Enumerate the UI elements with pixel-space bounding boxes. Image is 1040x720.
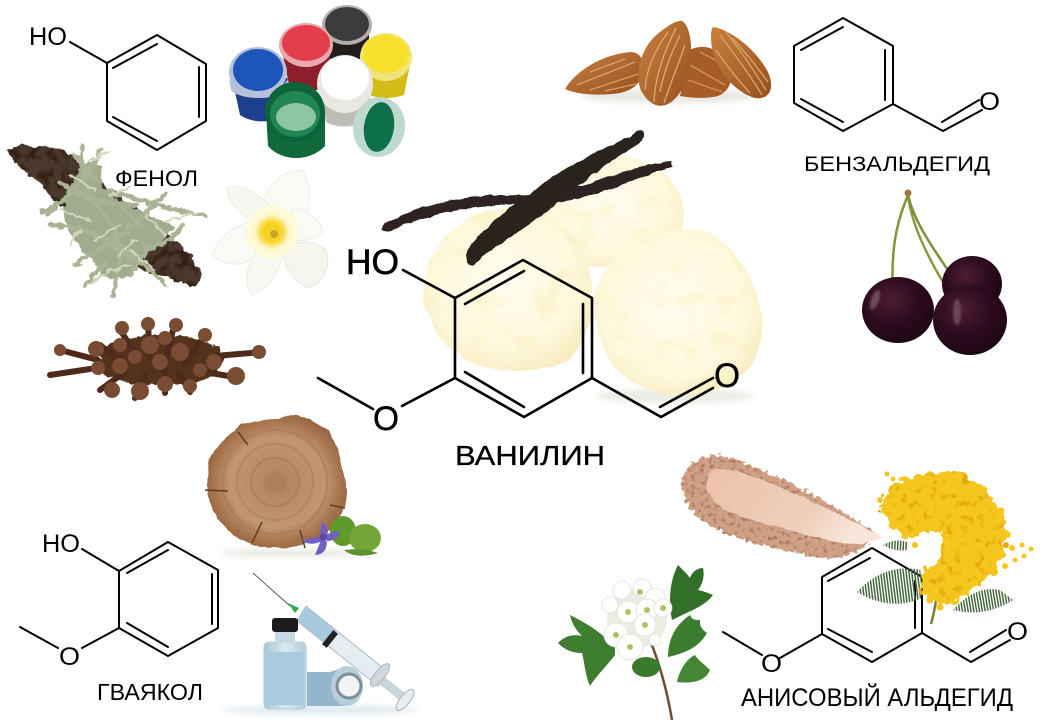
petals [262, 170, 310, 222]
back scoop [540, 156, 684, 268]
leaf: middle right [668, 615, 707, 657]
image: paint jars [229, 5, 412, 160]
molecule: guaiacol [20, 530, 218, 671]
yellow jar [362, 60, 411, 98]
image: cherries [862, 190, 1007, 355]
label: anisaldehyde: АНИСОВЫЙ АЛЬДЕГИД [741, 682, 1013, 712]
stems [931, 530, 985, 624]
image: cosmetic powder smear [682, 455, 882, 558]
inner double bonds [465, 271, 583, 407]
oxygen: methoxy: O [373, 400, 399, 438]
almond: left [565, 52, 643, 95]
molecule: vanillin [318, 243, 740, 438]
green lid [349, 94, 409, 160]
corona [246, 206, 298, 258]
oxygen: aldehyde: O [1007, 618, 1028, 646]
label: vanillin: ВАНИЛИН [455, 440, 605, 471]
stems [892, 195, 908, 295]
almond: front [638, 21, 691, 106]
oxygen: aldehyde: O [714, 357, 740, 395]
oxygen: O [59, 643, 80, 671]
lichen mass [64, 162, 176, 279]
image: violet flower and leaves [301, 516, 381, 556]
leaf: small [632, 657, 660, 677]
green open jar [266, 112, 325, 158]
image: almonds [565, 21, 771, 106]
image: lichen on bark [5, 146, 204, 296]
red jar [282, 50, 330, 90]
leaf: lower right [677, 655, 710, 682]
leaf: top right [670, 565, 713, 620]
fern leaves [857, 540, 1012, 612]
lichen branches [42, 146, 204, 296]
substituent bonds [318, 270, 713, 417]
left scoop [424, 208, 592, 370]
image: syringe and vials [222, 573, 418, 714]
bark [5, 146, 201, 285]
oxygen: methoxy: O [761, 650, 782, 678]
label: guaiacol: ГВАЯКОЛ [97, 679, 203, 705]
white jar [320, 88, 372, 126]
image: hawthorn sprig [558, 565, 713, 720]
molecule: benzaldehyde [794, 18, 1000, 131]
almond: right [711, 27, 771, 98]
molecule: anisaldehyde [723, 548, 1028, 678]
image: mimosa branch [857, 471, 1034, 624]
lying vial [307, 667, 345, 706]
ring [455, 260, 592, 417]
black jar [325, 25, 369, 59]
cherry: left [862, 277, 934, 343]
needle [253, 573, 290, 606]
image: vanilla ice cream scoops [424, 156, 762, 403]
label: benzaldehyde: БЕНЗАЛЬДЕГИД [804, 153, 990, 176]
blue jar [232, 78, 288, 121]
outlying balls [877, 472, 1034, 610]
molecule: phenol [29, 23, 206, 150]
image: cloves [50, 317, 266, 400]
standing vial [264, 642, 306, 709]
oxygen: O [979, 88, 1000, 116]
cherry: front right [933, 285, 1007, 355]
image: daffodil flower [213, 170, 328, 295]
flower cluster [602, 579, 672, 660]
stem [650, 640, 672, 720]
clove cluster mass [100, 335, 223, 385]
HO label: HO [42, 530, 80, 558]
HO label: HO [346, 243, 399, 282]
slice [207, 416, 347, 548]
flower mass [882, 471, 1007, 606]
cherry: back right [942, 256, 1002, 312]
plunger [380, 679, 404, 698]
image: vanilla beans [382, 131, 673, 265]
almond: back [680, 47, 732, 98]
label: phenol: ФЕНОЛ [115, 166, 198, 191]
HO label: HO [29, 23, 67, 51]
leaf: left [558, 615, 615, 686]
right scoop [594, 229, 762, 397]
syringe barrel [297, 606, 388, 686]
image: wood slice [205, 416, 360, 557]
